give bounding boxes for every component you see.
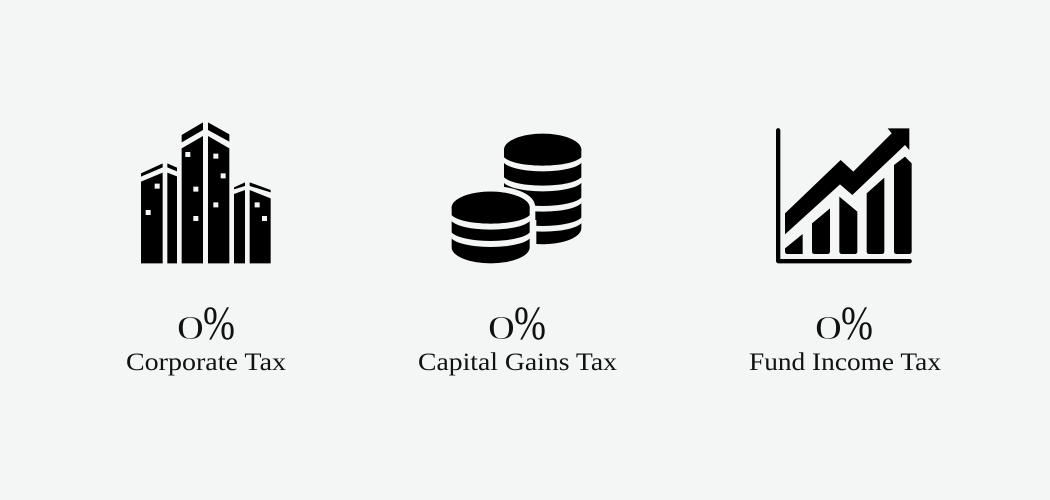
chart bars (785, 157, 912, 254)
stat: fund income tax 0% (814, 297, 873, 350)
label: capital gains tax: Capital Gains Tax (418, 349, 618, 376)
stat: fund income tax 0%: 0 (814, 310, 843, 347)
stat: fund income tax 0%: % (841, 297, 873, 350)
panel: corporate tax (126, 122, 287, 376)
panel: capital gains tax (418, 134, 618, 376)
stat: corporate tax 0%: 0 (176, 310, 205, 347)
panel: fund income tax (749, 128, 942, 376)
icon: rising bar chart with arrow (776, 128, 912, 263)
stat: capital gains tax 0% (487, 297, 546, 350)
stat: capital gains tax 0%: 0 (487, 310, 516, 347)
stat: capital gains tax 0%: % (514, 297, 546, 350)
chart axes (776, 128, 912, 263)
icon: stacks of coins (450, 134, 583, 263)
stat: corporate tax 0% (176, 297, 235, 350)
trend arrow (785, 128, 909, 234)
label: fund income tax: Fund Income Tax (749, 349, 942, 376)
label: corporate tax: Corporate Tax (126, 349, 287, 376)
icon: office buildings (141, 122, 271, 263)
stat: corporate tax 0%: % (203, 297, 235, 350)
